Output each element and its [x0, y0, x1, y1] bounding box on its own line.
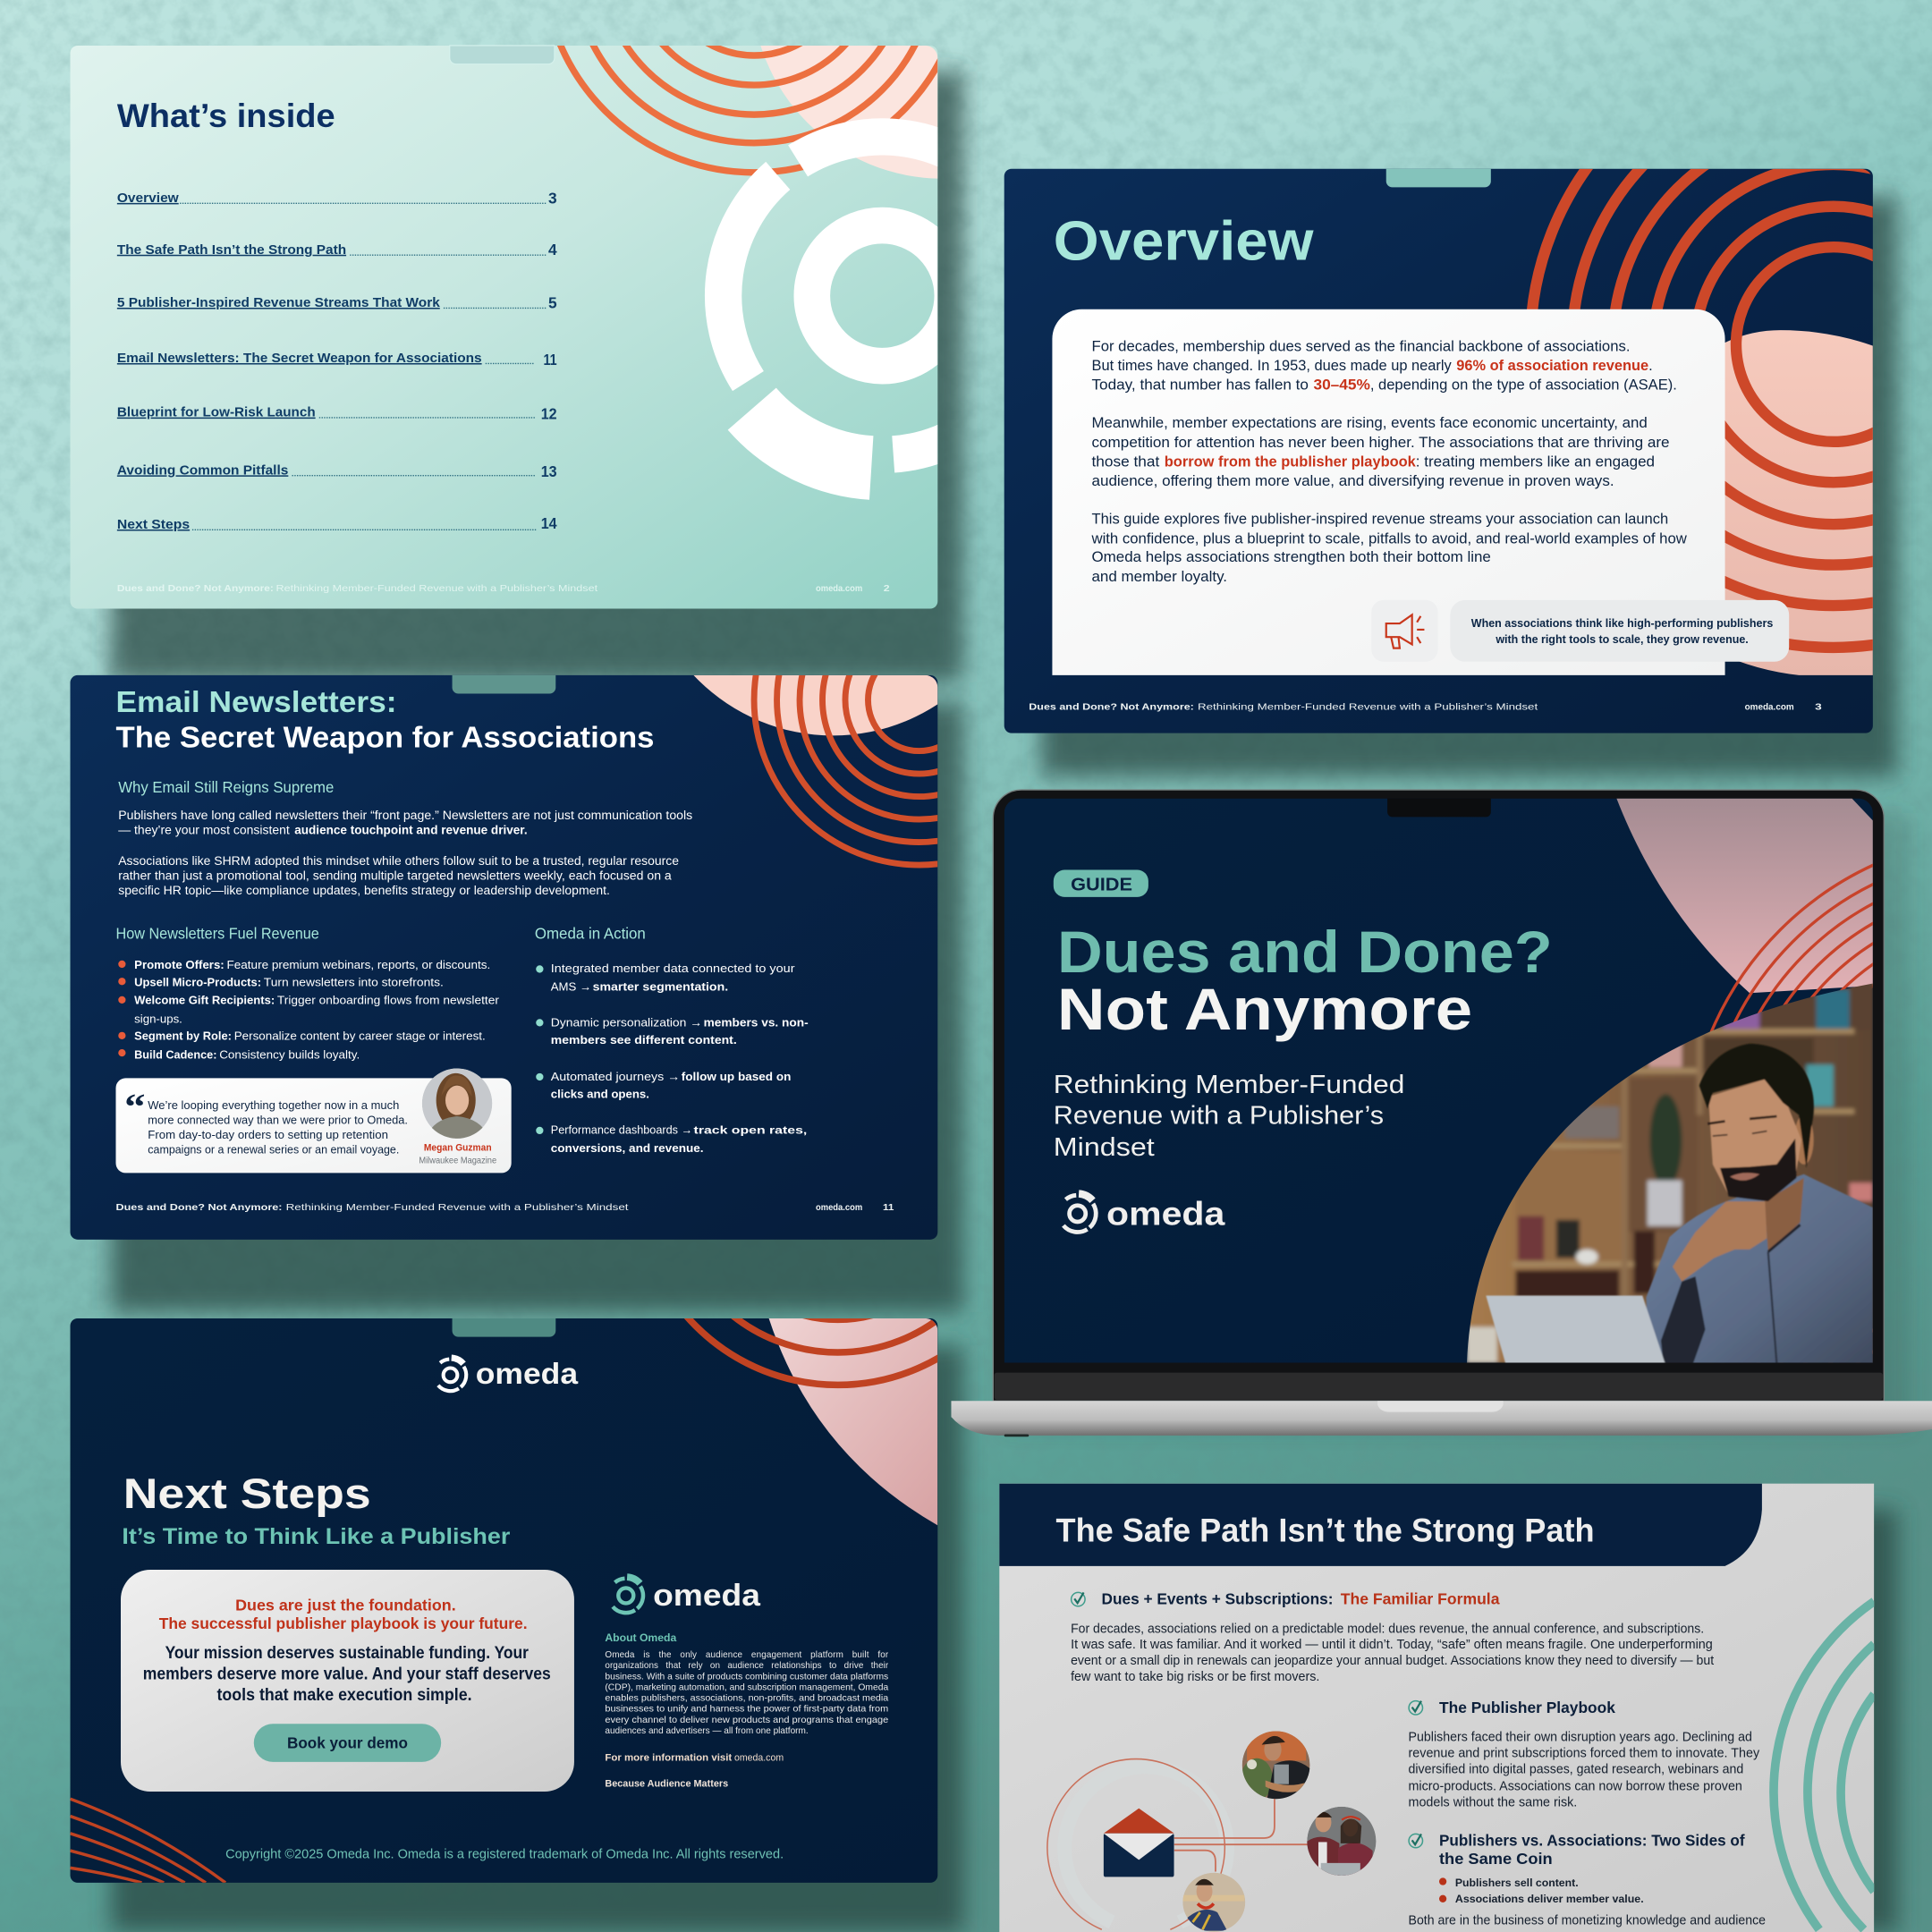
section: Omeda in Action: follow up based on	[682, 1070, 791, 1083]
section: Omeda in Action: members see different content.	[551, 1033, 737, 1046]
white text card: Meanwhile, member expectations are rising, events face economic uncertainty, and	[1092, 414, 1648, 431]
section: Omeda in Action: clicks and opens.	[551, 1087, 649, 1100]
panel: The Safe Path Isn't the Strong Path	[999, 1484, 1874, 1932]
ear and neck	[1794, 1115, 1814, 1165]
logo: omeda white	[1063, 1194, 1225, 1233]
table of contents: Blueprint for Low-Risk Launch	[117, 405, 316, 420]
logo: omeda	[438, 1358, 579, 1391]
hand and forearm	[1673, 1201, 1767, 1282]
section: How Newsletters Fuel Revenue: Promote Offers:	[134, 958, 225, 971]
table of contents: Next Steps	[117, 517, 190, 532]
footer: omeda.com	[1745, 702, 1794, 712]
tab notch	[1386, 169, 1491, 187]
quote card: From day-to-day orders to setting up retention	[148, 1128, 388, 1141]
logo: omeda: omeda	[476, 1358, 579, 1391]
section: The Publisher Playbook: models without the same risk.	[1409, 1795, 1577, 1809]
white text card: competition for attention has never been higher. The associations that are thriving are	[1092, 434, 1670, 451]
section: Why Email Still Reigns Supreme	[118, 778, 692, 897]
quote card: Megan Guzman	[424, 1143, 492, 1154]
heading: Next Steps	[123, 1470, 371, 1517]
quote card: campaigns or a renewal series or an email voyage.	[148, 1142, 399, 1156]
icon: envelope	[1104, 1809, 1174, 1877]
button: Book your demo	[254, 1724, 441, 1762]
footer	[1029, 702, 1822, 712]
about Omeda: enables publishers, associations, non-profits, and broadcast media	[605, 1694, 889, 1704]
callout: When associations think like high-performing publishers	[1471, 617, 1773, 630]
section: How Newsletters Fuel Revenue	[115, 925, 500, 1061]
white text card: borrow from the publisher playbook	[1165, 453, 1417, 470]
section: Publishers vs. Associations: the Same Coin	[1439, 1850, 1553, 1868]
section: Publishers vs. Associations: Publishers sell content.	[1455, 1877, 1579, 1889]
white text card: 30–45%	[1313, 376, 1370, 393]
footer: Dues and Done? Not Anymore:	[1029, 702, 1194, 712]
heading: Overview	[1054, 211, 1314, 273]
section: The Publisher Playbook: revenue and print subscriptions forced them to innovate. They	[1409, 1746, 1760, 1760]
quote card: “	[124, 1086, 146, 1127]
white text card: and member loyalty.	[1092, 568, 1227, 585]
section: Why Email Still Reigns Supreme: Associations like SHRM adopted this mindset while others follow suit to be a trusted, regular resource	[118, 854, 679, 868]
section: Omeda in Action: Dynamic personalization →	[551, 1015, 702, 1029]
hair	[1699, 1044, 1814, 1168]
logo: omeda teal	[613, 1577, 761, 1613]
white text card: audience, offering them more value, and diversifying revenue in proven ways.	[1092, 472, 1614, 489]
about Omeda: organizations that rely on audience relationships to drive their	[605, 1661, 889, 1671]
section: Omeda in Action: track open rates,	[694, 1123, 807, 1136]
decorative circle and arcs	[694, 674, 937, 868]
quote card: more connected way than we were prior to Omeda.	[148, 1113, 408, 1126]
footer	[115, 1203, 894, 1213]
laptop lid	[993, 790, 1884, 1401]
laptop with cover page	[951, 790, 1932, 1481]
section: Why Email Still Reigns Supreme: Why Email Still Reigns Supreme	[118, 778, 334, 796]
logo: omeda teal: omeda	[653, 1579, 761, 1613]
subtitle: Revenue with a Publisher’s	[1054, 1101, 1384, 1130]
heading: The Secret Weapon for Associations	[115, 721, 654, 754]
section: The Publisher Playbook: The Publisher Playbook	[1439, 1699, 1615, 1716]
chest skin and placket	[1765, 1178, 1804, 1252]
section: How Newsletters Fuel Revenue: Build Cadence:	[134, 1047, 216, 1061]
face	[1708, 1080, 1801, 1201]
white text card: with confidence, plus a blueprint to scale, pitfalls to avoid, and real-world examples of how	[1090, 530, 1687, 547]
bottom bezel	[995, 1373, 1883, 1400]
laptop base	[951, 1401, 1932, 1436]
footer: 3	[1815, 702, 1822, 712]
white text card	[1052, 309, 1725, 675]
section: Publishers vs. Associations: Associations deliver member value.	[1455, 1893, 1644, 1905]
footer: Rethinking Member-Funded Revenue with a Publisher’s Mindset	[276, 584, 597, 594]
section: The Publisher Playbook: diversified into digital passes, gated research, webinars and	[1409, 1762, 1743, 1776]
tab notch	[453, 675, 555, 694]
laptop screen: cover	[1004, 799, 1932, 1481]
section: Why Email Still Reigns Supreme: specific HR topic—like compliance updates, benefits strategy or leadership development.	[118, 884, 610, 897]
section: Dues + Events + Subscriptions: The Familiar Formula	[1341, 1590, 1501, 1608]
heading pill: GUIDE: GUIDE	[1071, 874, 1132, 894]
footer: Dues and Done? Not Anymore:	[115, 1203, 282, 1213]
section: Dues + Events + Subscriptions: It was safe. It was familiar. And it worked — until it didn’t. Today, “safe” often means fragile. One underperforming	[1071, 1638, 1713, 1652]
heading: The Safe Path Isn’t the Strong Path	[1056, 1511, 1595, 1548]
title	[1057, 919, 1553, 1043]
section: How Newsletters Fuel Revenue: How Newsletters Fuel Revenue	[115, 925, 319, 943]
footer	[117, 584, 890, 594]
white text card: : treating members like an engaged	[1416, 453, 1655, 470]
table of contents: Overview	[117, 191, 179, 206]
about Omeda: every channel to deliver new products and programs that engage	[605, 1716, 889, 1725]
small laptop	[1486, 1295, 1665, 1364]
footer: 2	[884, 584, 890, 594]
tab notch	[450, 46, 555, 64]
section: Why Email Still Reigns Supreme: audience touchpoint and revenue driver.	[294, 824, 528, 837]
decorative teal arcs	[1774, 1601, 1874, 1929]
section: Omeda in Action: Integrated member data connected to your	[551, 962, 795, 975]
about Omeda: (CDP), marketing automation, and subscription management, Omeda	[605, 1682, 889, 1692]
section: How Newsletters Fuel Revenue: Trigger onboarding flows from newsletter	[277, 994, 500, 1007]
footer: Dues and Done? Not Anymore:	[117, 584, 274, 594]
section: Omeda in Action: conversions, and revenue.	[551, 1141, 704, 1155]
call-to-action card: members deserve more value. And your staff deserves	[143, 1665, 551, 1684]
camera notch	[1387, 799, 1491, 817]
section: How Newsletters Fuel Revenue: sign-ups.	[134, 1012, 182, 1025]
about Omeda: For more information visit	[605, 1753, 733, 1764]
section: The Publisher Playbook	[1409, 1699, 1760, 1809]
shirt	[1646, 1174, 1873, 1364]
about Omeda: omeda.com	[734, 1753, 784, 1764]
table of contents: 5 Publisher-Inspired Revenue Streams That Work	[117, 295, 440, 310]
table of contents: 4	[548, 241, 557, 258]
tab notch	[453, 1318, 555, 1337]
footer: Rethinking Member-Funded Revenue with a Publisher’s Mindset	[1198, 702, 1538, 712]
copyright: Copyright ©2025 Omeda Inc. Omeda is a registered trademark of Omeda Inc. All rights reserved.	[225, 1847, 784, 1861]
white text card: those that	[1092, 453, 1160, 470]
heading	[115, 686, 654, 754]
about Omeda: business. With a suite of products combining customer data platforms	[605, 1673, 888, 1682]
section: Why Email Still Reigns Supreme: rather than just a promotional tool, sending multiple targeted newsletters weekly, each focused on a	[118, 869, 672, 883]
white text card: This guide explores five publisher-inspired revenue streams your association can launch	[1092, 510, 1668, 527]
call-to-action card: Dues are just the foundation.	[235, 1596, 456, 1614]
photo: man with headphones	[1182, 1873, 1245, 1932]
section: Omeda in Action: smarter segmentation.	[593, 980, 728, 994]
section: Omeda in Action: AMS →	[551, 980, 591, 994]
call-to-action card: tools that make execution simple.	[216, 1686, 472, 1705]
callout: with the right tools to scale, they grow revenue.	[1495, 633, 1749, 646]
table of contents: Avoiding Common Pitfalls	[117, 462, 288, 478]
section: How Newsletters Fuel Revenue: Turn newsletters into storefronts.	[264, 976, 444, 989]
section: How Newsletters Fuel Revenue: Welcome Gift Recipients:	[134, 994, 275, 1007]
section: Dues + Events + Subscriptions: For decades, associations relied on a predictable model: dues revenue, the annual conference, and subscriptions.	[1071, 1622, 1704, 1636]
table of contents: 11	[544, 351, 557, 369]
section: Omeda in Action: Automated journeys →	[551, 1070, 680, 1083]
panel: What's inside	[70, 45, 937, 608]
about Omeda: Because Audience Matters	[605, 1778, 728, 1789]
white text card: But times have changed. In 1953, dues made up nearly	[1092, 357, 1452, 374]
panel: Email Newsletters	[70, 674, 937, 1240]
white text card: .	[1648, 357, 1653, 374]
beard	[1720, 1139, 1796, 1201]
photo: man at laptop in library	[1466, 973, 1874, 1364]
table of contents: 14	[541, 514, 557, 532]
white text card: 96% of association revenue	[1456, 357, 1648, 374]
callout	[1450, 600, 1789, 662]
icon: megaphone	[1371, 600, 1438, 662]
section: Why Email Still Reigns Supreme: — they’re your most consistent	[118, 824, 290, 837]
about Omeda: audiences and advertisers — all from one platform.	[605, 1726, 809, 1736]
table of contents: 3	[548, 189, 557, 207]
decorative pink shape and arcs	[1527, 168, 1873, 675]
about Omeda: Omeda is the only audience engagement platform built for	[605, 1650, 889, 1660]
header banner	[999, 1484, 1762, 1566]
call-to-action card: Your mission deserves sustainable funding. Your	[165, 1644, 529, 1663]
table of contents: Email Newsletters: The Secret Weapon for Associations	[117, 351, 482, 366]
section: Dues + Events + Subscriptions: event or a small dip in renewals can jeopardize your annual budget. Associations know they need to diversify — but	[1071, 1654, 1714, 1668]
white text card: Today, that number has fallen to	[1092, 376, 1309, 393]
section: Dues + Events + Subscriptions	[1071, 1590, 1714, 1684]
section: Publishers vs. Associations	[1409, 1832, 1766, 1928]
section: Why Email Still Reigns Supreme: Publishers have long called newsletters their “front page.” Newsletters are not just communication tools	[118, 809, 692, 822]
photo: reader with plants	[1241, 1731, 1311, 1801]
section: Omeda in Action: Performance dashboards →	[551, 1123, 692, 1136]
section: Dues + Events + Subscriptions: few want to take big risks or be first movers.	[1071, 1670, 1319, 1684]
photo: couple at laptop	[1306, 1807, 1376, 1877]
section: How Newsletters Fuel Revenue: Segment by Role:	[134, 1030, 232, 1043]
section: Publishers vs. Associations: Publishers vs. Associations: Two Sides of	[1439, 1832, 1745, 1850]
decorative pink shape and arcs	[70, 1318, 937, 1883]
section: How Newsletters Fuel Revenue: Feature premium webinars, reports, or discounts.	[226, 958, 490, 971]
call-to-action card	[121, 1570, 574, 1792]
section: Omeda in Action: Omeda in Action	[535, 925, 646, 943]
about Omeda: businesses to unify and harness the power of first-party data from	[605, 1704, 888, 1714]
quote card	[115, 1068, 512, 1173]
white text card: Omeda helps associations strengthen both their bottom line	[1092, 548, 1491, 565]
table of contents: 13	[541, 462, 557, 480]
heading: Email Newsletters:	[115, 686, 397, 719]
footer: omeda.com	[816, 1203, 862, 1213]
logo: omeda white: omeda	[1106, 1194, 1225, 1232]
brows	[1707, 1116, 1776, 1123]
dark sleeve lining	[1661, 1276, 1706, 1364]
panel: Overview	[1004, 168, 1873, 733]
section: The Publisher Playbook: Publishers faced their own disruption years ago. Declining ad	[1409, 1730, 1752, 1744]
subtitle: Mindset	[1054, 1133, 1155, 1162]
white text card: For decades, membership dues served as the financial backbone of associations.	[1092, 338, 1631, 355]
thin arcs	[1685, 835, 1932, 1481]
decorative circle and arcs	[556, 46, 937, 500]
subtitle	[1054, 1071, 1404, 1162]
section: How Newsletters Fuel Revenue: Consistency builds loyalty.	[219, 1047, 360, 1061]
quote card: We’re looping everything together now in a much	[148, 1098, 399, 1112]
subheading: It’s Time to Think Like a Publisher	[122, 1525, 511, 1549]
table of contents: The Safe Path Isn’t the Strong Path	[117, 242, 346, 258]
section: Omeda in Action: members vs. non-	[704, 1015, 809, 1029]
illustration: email network	[1047, 1731, 1376, 1932]
panel: Next Steps	[70, 1318, 937, 1883]
heading pill: GUIDE	[1054, 870, 1148, 897]
footer: Rethinking Member-Funded Revenue with a Publisher’s Mindset	[286, 1203, 629, 1213]
section: How Newsletters Fuel Revenue: Upsell Micro-Products:	[134, 976, 261, 989]
table of contents: 5	[548, 293, 557, 311]
title: Not Anymore	[1057, 977, 1472, 1043]
white text card: , depending on the type of association (ASAE).	[1370, 376, 1677, 393]
section: Omeda in Action	[535, 925, 809, 1155]
table of contents	[117, 189, 557, 532]
section: Publishers vs. Associations: Both are in the business of monetizing knowledge and audience	[1409, 1914, 1766, 1928]
button: Book your demo: Book your demo	[287, 1734, 408, 1752]
footer: omeda.com	[816, 584, 862, 594]
subtitle: Rethinking Member-Funded	[1054, 1071, 1404, 1099]
heading: What’s inside	[117, 97, 335, 134]
section: Dues + Events + Subscriptions: Dues + Events + Subscriptions:	[1102, 1590, 1334, 1608]
call-to-action card: The successful publisher playbook is your future.	[159, 1614, 528, 1632]
about Omeda	[605, 1631, 889, 1789]
section: How Newsletters Fuel Revenue: Personalize content by career stage or interest.	[234, 1030, 486, 1043]
title: Dues and Done?	[1057, 919, 1553, 986]
footer: 11	[883, 1203, 894, 1213]
quote card: Milwaukee Magazine	[419, 1156, 496, 1165]
table of contents: 12	[541, 404, 557, 422]
about Omeda: About Omeda	[605, 1631, 677, 1644]
pink curved shape	[1616, 799, 1874, 993]
portrait: Megan Guzman	[422, 1068, 492, 1141]
section: The Publisher Playbook: micro-products. Associations can now borrow these proven	[1409, 1780, 1742, 1794]
